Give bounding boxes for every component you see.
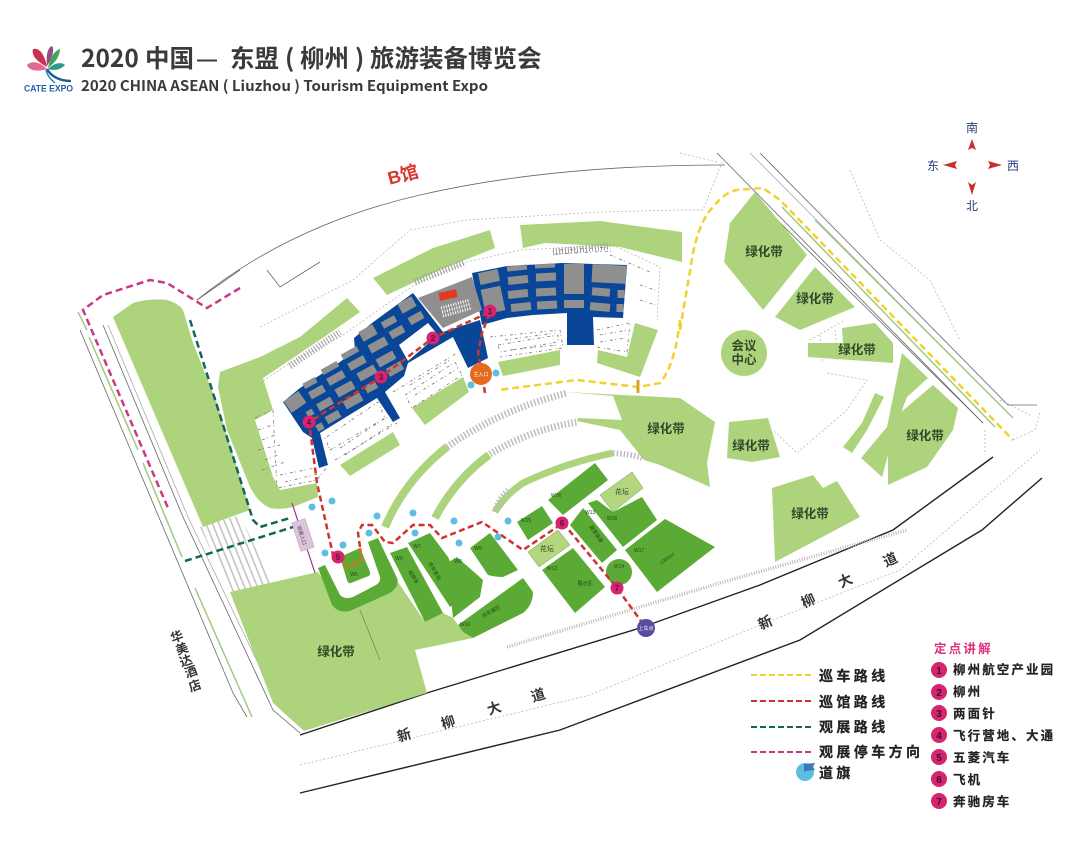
zone labels: 1000m² (659, 552, 676, 567)
zone labels: W18 (607, 516, 617, 522)
title: — (197, 49, 217, 71)
route: hall tour (red) (309, 312, 646, 628)
hall label: B馆: B馆 (385, 160, 421, 189)
legend: numbered stops: 飞行营地、大通 (953, 728, 1055, 743)
text labels on green belts: 绿化带 (317, 644, 355, 659)
panel: exhibition hall floor plan (283, 263, 627, 468)
legend: routes: 道旗 (819, 765, 854, 781)
legend: routes: 观展路线 (819, 719, 889, 735)
route: shuttle (yellow) (498, 188, 1013, 440)
zone labels: 展示区 (577, 581, 593, 587)
route stop markers: 5 (336, 553, 341, 562)
compass: 南 (966, 120, 978, 135)
compass (927, 120, 1019, 213)
route: parking direction (pink) (83, 280, 240, 508)
exhibition rooms (284, 263, 626, 432)
zone labels: 房车展区 (481, 604, 502, 620)
title: 柳州 (300, 40, 349, 75)
building draft linework (255, 245, 660, 488)
road linework (78, 153, 1042, 793)
legend: routes (751, 668, 923, 781)
zone labels: W9 (474, 546, 482, 552)
text labels on green belts: 绿化带 (796, 291, 834, 306)
zone labels: W7 (413, 544, 421, 550)
legend: numbered stops: 5 (936, 753, 942, 764)
route stop markers: 3 (379, 373, 384, 382)
zone labels: W13 (585, 510, 595, 516)
zone labels: W14 (614, 564, 624, 570)
compass: 东 (927, 159, 939, 173)
entrance markers: 主入口 (473, 371, 489, 378)
legend: routes: 观展停车方向 (819, 744, 923, 760)
entrance markers (470, 363, 655, 637)
title: 中国 (145, 40, 194, 75)
text labels on green belts: 绿化带 (647, 421, 685, 436)
zone labels: W15 (521, 518, 531, 524)
panel: landscape belts (绿化带) (113, 192, 958, 731)
entry gate line and sign (292, 503, 315, 573)
legend: numbered stops: 2 (936, 688, 942, 699)
zone labels: 越野车 (407, 569, 420, 586)
legend: numbered stops: 两面针 (953, 706, 997, 721)
text labels on green belts: 会议 (731, 338, 757, 353)
legend: numbered stops: 柳州 (953, 684, 982, 699)
panel: outdoor exhibition zones (318, 463, 715, 638)
zone labels: W5 (350, 572, 358, 578)
crosswalk hatch (200, 515, 272, 592)
legend: numbered stops: 6 (936, 775, 942, 786)
zone labels: 房车营地 (426, 561, 442, 582)
legend: numbered stops: 五菱汽车 (953, 750, 1011, 765)
logo: CATE EXPO: CATE EXPO (24, 84, 73, 94)
zone labels: 露营装备 (588, 524, 605, 544)
text labels on green belts: 绿化带 (791, 506, 829, 521)
zone labels: W16 (551, 493, 561, 499)
legend: numbered stops: 奔驰房车 (953, 794, 1011, 809)
road name: 新柳大道 lower: 新柳大道 (395, 685, 547, 745)
red stage (438, 289, 458, 301)
entrance markers: 上车点 (638, 625, 654, 632)
zone labels: W8 (454, 559, 462, 565)
route stop markers: 2 (431, 334, 436, 343)
text labels on green belts: 绿化带 (838, 342, 876, 357)
legend: numbered stops (931, 641, 1055, 809)
zone labels: 花坛 (615, 487, 629, 496)
route stop markers: 1 (488, 307, 493, 316)
legend: numbered stops: 4 (936, 731, 942, 742)
zone labels: W12 (547, 566, 557, 572)
legend: numbered stops: 柳州航空产业园 (953, 662, 1055, 677)
title: 旅游装备博览会 (370, 40, 542, 75)
legend: routes: 巡车路线 (819, 668, 889, 684)
route: exhibition (teal) (185, 320, 293, 561)
legend: numbered stops: 7 (936, 797, 942, 808)
legend: numbered stops: 3 (936, 709, 942, 720)
text labels on green belts: 中心 (731, 352, 757, 367)
zone labels: W6 (395, 556, 403, 562)
text labels on green belts: 绿化带 (745, 244, 783, 259)
text labels on green belts: 绿化带 (732, 438, 770, 453)
road name: 新柳大道 upper: 新柳大道 (756, 549, 900, 633)
title: 2020 (81, 40, 139, 75)
route stop markers: 4 (307, 418, 312, 427)
text labels on green belts: 绿化带 (906, 428, 944, 443)
zone labels (350, 487, 676, 628)
route stop markers: 7 (615, 584, 620, 593)
hotel label: 华美达酒店 (168, 627, 203, 695)
legend: numbered stops: 飞机 (953, 772, 982, 787)
title: 东盟 (230, 40, 279, 75)
text labels on green belts (317, 244, 944, 659)
title (81, 40, 542, 96)
route stop markers: 6 (560, 519, 565, 528)
compass: 西 (1007, 159, 1019, 173)
legend: routes: 巡馆路线 (819, 694, 889, 710)
route stop markers (302, 304, 624, 594)
entry gate line and sign: 观展入口 (295, 525, 307, 546)
title: ) (355, 40, 364, 75)
title: 2020 CHINA ASEAN ( Liuzhou ) Tourism Equipment Expo (81, 75, 488, 96)
seating blocks (441, 300, 472, 316)
legend: numbered stops: 1 (936, 666, 942, 677)
zone labels: W17 (634, 548, 644, 554)
compass: 北 (966, 199, 978, 213)
zone labels: 花坛 (540, 544, 554, 553)
legend: numbered stops: 定点讲解 (934, 641, 993, 656)
logo: CATE EXPO (24, 46, 73, 94)
zone labels: W10 (460, 622, 470, 628)
title: ( (285, 40, 294, 75)
flags (308, 370, 512, 556)
